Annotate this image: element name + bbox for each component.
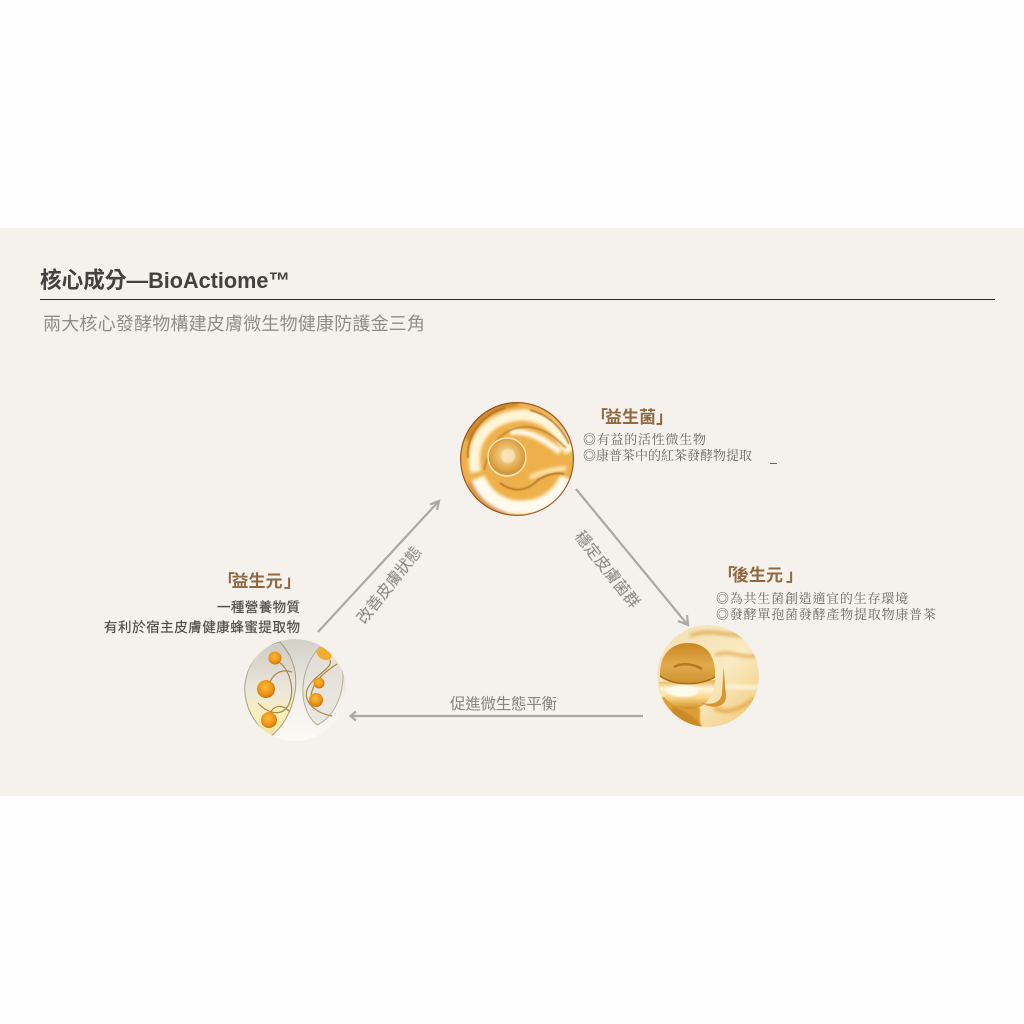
arrow: probiotics to postbiotics (576, 489, 688, 625)
arrow label: improve skin condition: 改善皮膚狀態 (351, 541, 426, 628)
arrow: prebiotics to probiotics (318, 501, 439, 632)
arrow: postbiotics to prebiotics (350, 712, 643, 720)
arrow label: promote microbial balance: 促進微生態平衡 (450, 692, 557, 714)
heading: probiotics: 「益生菌」 (591, 403, 673, 428)
text block: prebiotics (104, 567, 301, 636)
list: prebiotics items (104, 596, 300, 636)
text block: probiotics (583, 403, 752, 464)
heading: postbiotics: 「後生元」 (718, 561, 803, 586)
subtitle: 兩大核心發酵物構建皮膚微生物健康防護金三角 (43, 310, 425, 336)
list: prebiotics items: 一種營養物質 (217, 596, 300, 616)
text block: postbiotics (716, 561, 936, 623)
icon: postbiotics golden jar (657, 625, 762, 730)
heading: prebiotics: 「益生元」 (218, 567, 301, 592)
title: 核心成分—BioActiome™ (40, 268, 290, 293)
panel: beige background band (0, 228, 1024, 796)
arrow label: stabilize skin flora: 穩定皮膚菌群 (570, 526, 646, 612)
list: prebiotics items: 有利於宿主皮膚健康蜂蜜提取物 (104, 616, 300, 636)
list: probiotics items (583, 429, 752, 464)
list: probiotics items: ◎康普茶中的紅茶發酵物提取 (583, 445, 752, 464)
list: postbiotics items: ◎為共生菌創造適宜的生存環境 (716, 588, 908, 607)
list: postbiotics items (716, 588, 936, 623)
list: postbiotics items: ◎發酵單孢菌發酵產物提取物康普茶 (716, 604, 936, 623)
icon: prebiotics capsules (244, 639, 346, 741)
list: probiotics items: ◎有益的活性微生物 (583, 429, 706, 448)
icon: probiotics golden droplet (460, 402, 574, 516)
